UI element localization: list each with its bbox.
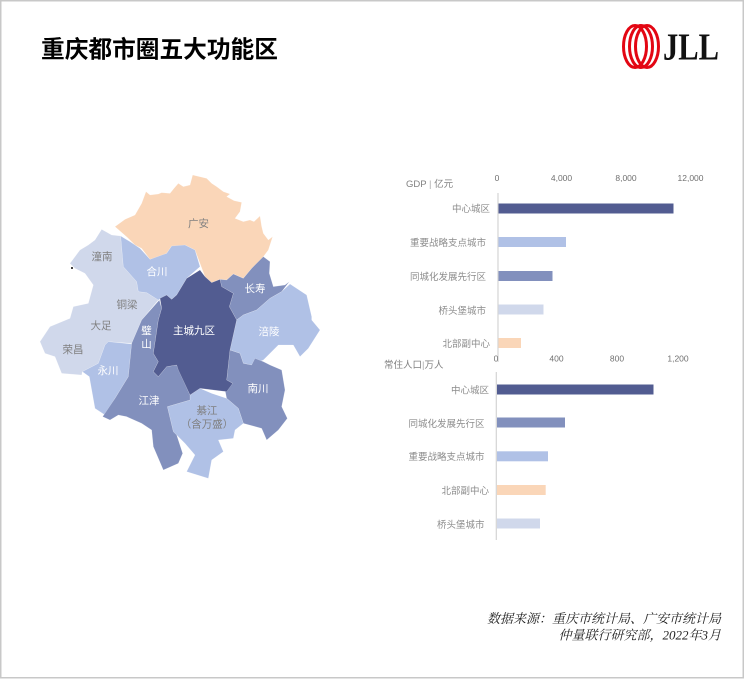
map label: Tongnan: 潼南 — [92, 250, 112, 263]
logo wordmark: JLL — [663, 26, 719, 68]
category labels: GDP — [410, 203, 490, 350]
map label: Bishan: 山 — [141, 338, 152, 350]
icon: red interlocking rings — [624, 26, 658, 68]
region: Fuling — [230, 284, 320, 365]
bar: central city population — [497, 384, 654, 394]
region: Yongchuan — [82, 342, 132, 415]
bar: central city GDP — [498, 204, 674, 214]
category labels: population — [408, 384, 489, 531]
map label: Guang'an: 广安 — [188, 217, 209, 230]
region: Guang'an — [115, 175, 273, 283]
bar chart: resident population — [384, 354, 689, 540]
map label: Dazu: 大足 — [90, 319, 112, 332]
source note: 数据来源：重庆市统计局、广安市统计局 — [487, 611, 722, 626]
bar: northern sub-centre population — [497, 485, 546, 495]
map label: Fuling: 涪陵 — [258, 325, 280, 338]
title: 重庆都市圈五大功能区 — [41, 36, 278, 64]
map label: Qijiang: （含万盛） — [181, 418, 233, 430]
bar chart: GDP — [406, 173, 704, 362]
category labels: population: 同城化发展先行区 — [408, 418, 485, 430]
map label: main city nine districts: 主城九区 — [173, 325, 215, 337]
bar: northern sub-centre GDP — [498, 338, 521, 348]
map label: Hechuan: 合川 — [146, 265, 168, 278]
map label: Tongliang: 铜梁 — [116, 298, 138, 311]
region: main city nine districts — [153, 270, 237, 395]
map label: Jiangjin: 江津 — [138, 395, 160, 407]
axis labels: GDP — [495, 173, 704, 183]
axis labels: population: 800 — [610, 354, 624, 364]
source note — [487, 611, 722, 642]
axis labels: population: 400 — [549, 354, 564, 364]
category labels: population: 北部副中心 — [441, 485, 489, 497]
axis labels: population — [494, 354, 689, 364]
category labels: GDP: 同城化发展先行区 — [410, 271, 486, 283]
region: Hechuan — [121, 236, 200, 300]
bar: integration zone population — [497, 418, 565, 428]
source note: 仲量联行研究部，2022年3月 — [558, 628, 722, 642]
category labels: GDP: 重要战略支点城市 — [410, 237, 486, 249]
category labels: GDP: 中心城区 — [452, 203, 490, 215]
region: bridgehead cities — [40, 229, 158, 375]
map: five functional zones — [40, 175, 320, 478]
logo: JLL — [624, 26, 719, 68]
category labels: population: 桥头堡城市 — [437, 519, 485, 531]
map label: Changshou: 长寿 — [244, 282, 266, 295]
category labels: population: 中心城区 — [451, 384, 489, 396]
bar: strategic cities population — [497, 451, 548, 461]
map label: Yongchuan: 永川 — [98, 364, 118, 377]
region: Nanchuan — [225, 350, 287, 440]
axis labels: population: 0 — [494, 354, 499, 364]
axis labels: GDP: 8,000 — [615, 173, 637, 183]
bar: strategic cities GDP — [498, 237, 566, 247]
bar: bridgehead cities GDP — [498, 304, 544, 314]
region: Changshou — [220, 257, 289, 320]
category labels: GDP: 桥头堡城市 — [438, 305, 486, 317]
bar: bridgehead cities population — [497, 518, 540, 528]
map label: Bishan: 璧 — [141, 325, 152, 337]
category labels: population: 重要战略支点城市 — [408, 451, 485, 463]
map marker: small dot — [71, 267, 73, 269]
chart title: population: 常住人口|万人 — [384, 359, 444, 371]
axis labels: GDP: 0 — [495, 173, 500, 183]
map label: Rongchang: 荣昌 — [62, 344, 84, 356]
axis labels: GDP: 4,000 — [551, 173, 572, 183]
axis labels: population: 1,200 — [667, 354, 689, 364]
axis labels: GDP: 12,000 — [678, 173, 704, 183]
region: Jiangjin and Bishan — [103, 300, 190, 470]
map label: Qijiang: 綦江 — [196, 405, 218, 417]
category labels: GDP: 北部副中心 — [442, 338, 490, 350]
chart title: GDP: GDP | 亿元 — [406, 178, 454, 190]
region: Qijiang — [167, 388, 243, 478]
map label: Nanchuan: 南川 — [248, 382, 268, 395]
bar: integration zone GDP — [498, 271, 552, 281]
